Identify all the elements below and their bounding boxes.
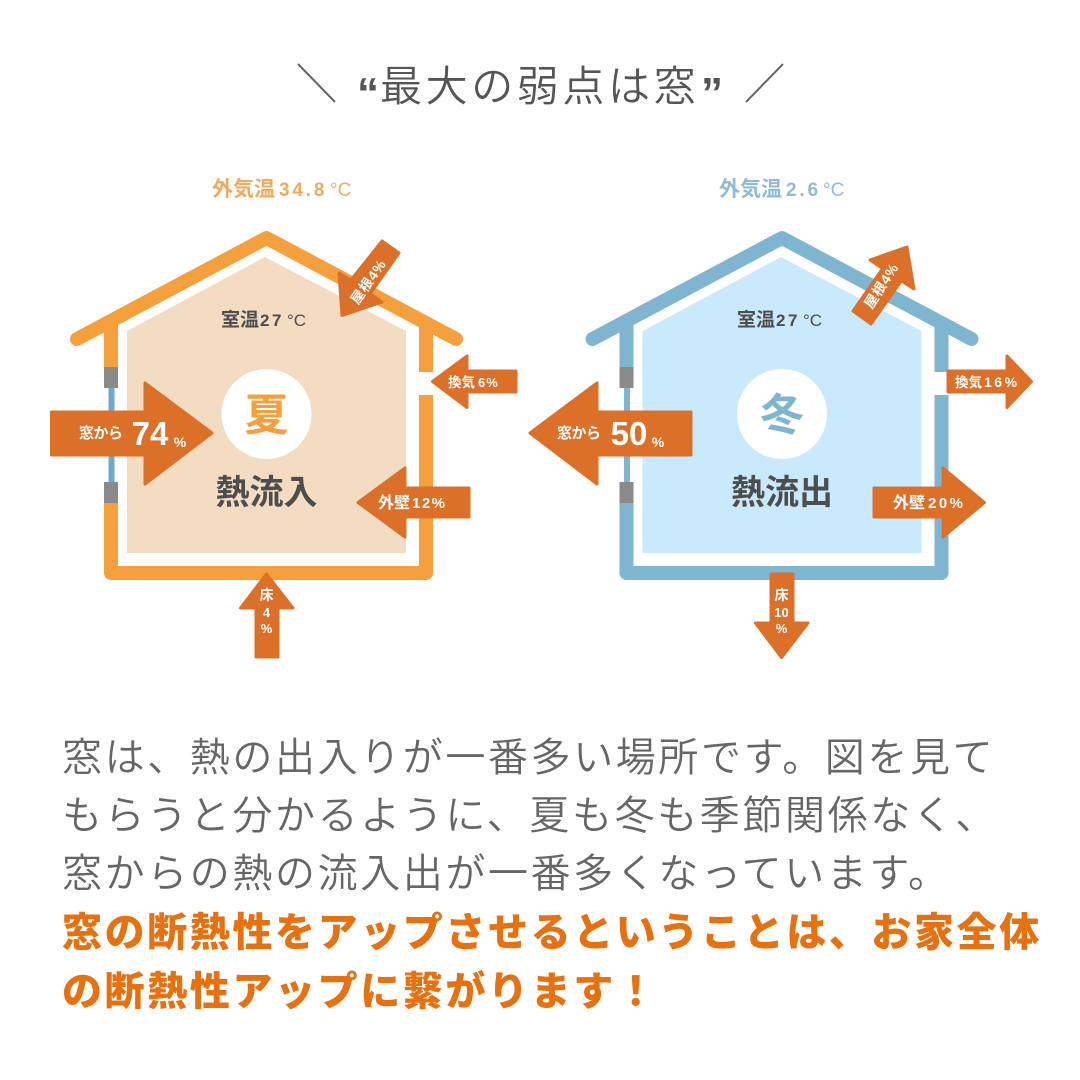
arrow: window 74%: % xyxy=(174,434,187,450)
arrow: floor 10%: 10 xyxy=(774,605,789,620)
room temperature winter: 室温 xyxy=(737,310,775,331)
arrow: wall 12%: 12% xyxy=(412,495,447,512)
arrow: wall 12%: 外壁 xyxy=(378,495,410,512)
text block: highlighted conclusion xyxy=(62,900,1042,1017)
room temperature summer: °C xyxy=(287,311,306,330)
arrow: roof 4% xyxy=(339,241,399,316)
winter window xyxy=(620,367,634,503)
outside temperature summer: 外気温 xyxy=(212,178,275,201)
outside temperature winter: °C xyxy=(823,180,844,201)
summer house frame xyxy=(77,238,456,573)
arrow: wall 20%: 20% xyxy=(928,495,966,512)
heat inflow label: 熱流入 xyxy=(216,465,318,514)
summer window xyxy=(104,367,118,503)
room temperature winter: 27 xyxy=(776,311,800,330)
arrow: floor 4%: 床 xyxy=(260,587,274,603)
text block: explanation xyxy=(62,725,998,899)
arrow: window 50%: 50 xyxy=(611,415,647,452)
room temperature winter: °C xyxy=(803,311,822,330)
panel: winter house xyxy=(530,178,1032,658)
summer interior xyxy=(127,257,406,553)
arrow: floor 4% xyxy=(240,574,293,657)
text block: highlighted conclusion: 窓の断熱性をアップさせるということは、お家全体 xyxy=(62,900,1042,958)
outside temperature winter: 2.6 xyxy=(786,180,821,201)
summer badge xyxy=(222,369,312,459)
arrow: window 50%: 窓から xyxy=(557,424,601,442)
winter interior xyxy=(642,257,922,553)
arrow: window 74%: 窓から xyxy=(79,424,123,442)
arrow: wall 20%: 外壁 xyxy=(893,495,925,512)
title: “ xyxy=(357,69,379,118)
arrow: floor 4%: % xyxy=(261,621,273,636)
outside temperature summer: °C xyxy=(330,180,351,201)
arrow: roof 4%: 屋根4% xyxy=(347,256,389,307)
text block: explanation: 窓は、熱の出入りが一番多い場所です。図を見て xyxy=(62,725,995,783)
arrow: window 74% xyxy=(52,383,212,484)
arrow: ventilation 6%: 換気 xyxy=(448,375,475,390)
winter house frame xyxy=(592,238,972,573)
panel: summer house xyxy=(52,178,516,657)
arrow: wall 20% xyxy=(874,468,984,537)
title xyxy=(298,53,783,118)
arrow: window 50%: % xyxy=(652,434,665,450)
arrow: floor 4%: 4 xyxy=(263,605,271,620)
room temperature summer: 27 xyxy=(260,311,284,330)
winter badge xyxy=(737,369,827,459)
arrow: window 74%: 74 xyxy=(132,415,169,452)
arrow: ventilation 6% xyxy=(432,356,516,408)
room temperature summer: 室温 xyxy=(221,310,259,331)
title: ” xyxy=(701,69,723,118)
arrow: floor 10% xyxy=(756,574,808,658)
arrow: ventilation 6%: 6% xyxy=(478,375,499,390)
arrow: ventilation 16%: 換気 xyxy=(955,375,982,390)
arrow: roof 4% winter xyxy=(853,247,914,324)
arrow: roof 4% winter: 屋根4% xyxy=(861,260,902,311)
text block: explanation: もらうと分かるように、夏も冬も季節関係なく、 xyxy=(62,783,998,841)
outside temperature summer: 34.8 xyxy=(279,180,327,201)
title: 最大の弱点は窓 xyxy=(380,53,699,114)
arrow: floor 10%: 床 xyxy=(774,587,788,603)
arrow: ventilation 16% xyxy=(948,356,1032,408)
arrow: window 50% xyxy=(530,383,691,484)
arrow: floor 10%: % xyxy=(776,621,788,636)
text block: explanation: 窓からの熱の流入出が一番多くなっています。 xyxy=(62,841,951,899)
summer badge: 夏 xyxy=(244,379,288,443)
arrow: wall 12% xyxy=(358,468,469,537)
outside temperature winter: 外気温 xyxy=(719,178,782,201)
winter badge: 冬 xyxy=(760,379,804,443)
heat outflow label: 熱流出 xyxy=(731,465,833,514)
text block: highlighted conclusion: の断熱性アップに繋がります！ xyxy=(62,959,658,1017)
arrow: ventilation 16%: 16% xyxy=(984,374,1020,390)
